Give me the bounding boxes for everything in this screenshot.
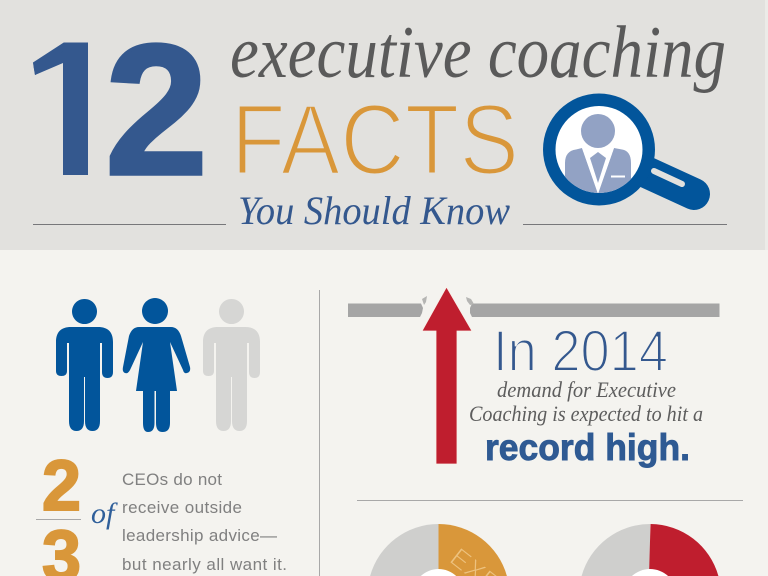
text: CEOs advice: CEOs do not [122,470,222,489]
text: CEOs advice: leadership advice— [122,526,277,545]
icon: man blue [56,299,113,431]
word: of: of [91,497,118,530]
header panel [0,0,768,250]
panel: CEOs statistic [36,298,287,576]
text: demand for Executive Coaching: Coaching is expected to hit a [469,401,703,426]
broken ceiling bar [348,296,720,317]
donut chart: gold [370,524,507,576]
text: demand for Executive Coaching [469,377,703,426]
icon: man grey [203,299,260,431]
panel: record high demand [348,287,720,468]
donut chart: red [582,524,718,576]
title: FACTS: FACTS [231,84,519,196]
title number 12: 2 [105,7,208,214]
text: CEOs advice: receive outside [122,498,242,517]
icon: woman blue [123,298,190,432]
subtitle: You Should Know: You Should Know [238,188,510,233]
heading: In 2014: In 2014 [493,319,668,384]
text: CEOs advice [122,470,287,574]
fraction two thirds: 2 [42,447,81,526]
text: demand for Executive Coaching: demand for Executive [497,377,676,402]
title number 12 [32,42,202,176]
icon: magnifying glass with executive [543,94,694,206]
fraction two thirds [36,447,81,576]
title number 12: 1 [20,7,123,214]
text: CEOs advice: but nearly all want it. [122,555,287,574]
text: record high: record high. [485,427,690,468]
icon: red arrow [422,287,472,464]
